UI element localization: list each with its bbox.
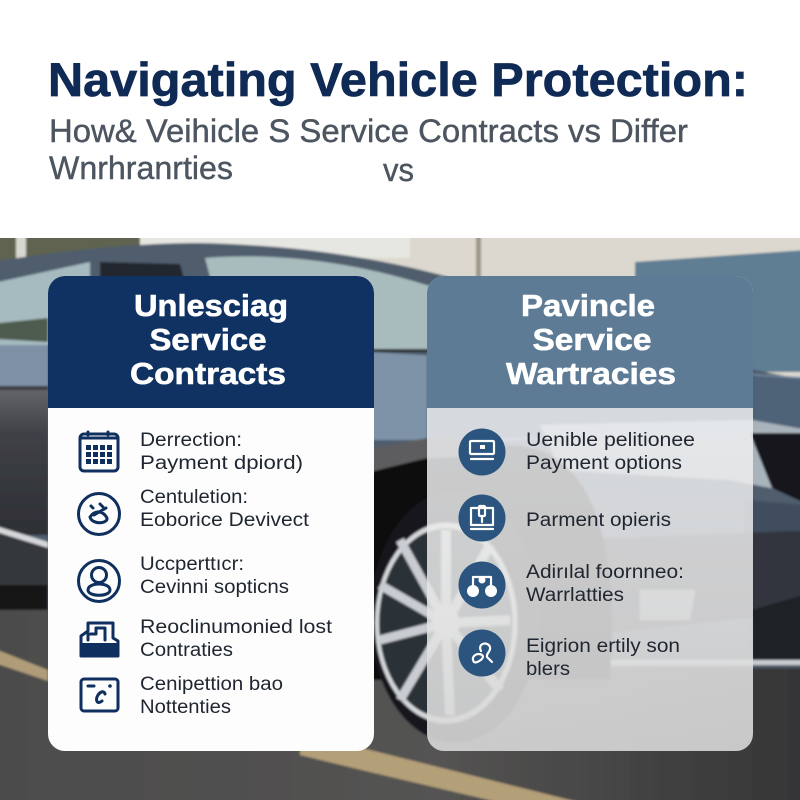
parking lines <box>0 643 48 681</box>
panel heading: Service <box>532 322 652 357</box>
item text 3: Uccperttıcr: <box>140 554 244 575</box>
item text 4 <box>526 636 680 680</box>
item text 1 <box>140 430 303 474</box>
subtitle: Wnrhranrties <box>49 150 233 186</box>
item text 3: Warrlatties <box>526 585 624 606</box>
item text 3: Cevinni sopticns <box>140 577 289 598</box>
panel heading: Wartracies <box>506 356 676 391</box>
item text 5: Cenipettion bao <box>140 674 283 695</box>
panel heading: Unlesciag <box>134 288 288 323</box>
icon: calendar <box>80 432 118 471</box>
item text 5 <box>140 674 283 718</box>
wheel arch and tyre <box>370 444 612 680</box>
item text 2: Parment opieris <box>526 510 671 531</box>
item text 4: Contraties <box>140 640 233 661</box>
panel header <box>48 276 374 408</box>
icon: folder <box>81 623 118 656</box>
subtitle: How& Veihicle S Service Contracts vs Differ <box>49 113 688 149</box>
item text 1: Uenible pelitionee <box>526 430 695 451</box>
item text 4: blers <box>526 659 570 680</box>
subtitle: vs <box>383 152 414 188</box>
icon: circle face <box>78 494 120 534</box>
panel heading <box>130 288 288 391</box>
icon: payment card <box>458 428 506 476</box>
panel heading: Service <box>150 322 266 357</box>
item text 1 <box>526 430 695 474</box>
icon: person <box>78 560 120 602</box>
car body <box>0 243 800 668</box>
white title band <box>0 0 800 238</box>
item text 4 <box>140 617 333 661</box>
item text 1: Payment dpiord) <box>140 453 303 474</box>
icon: note card <box>81 679 118 711</box>
icon: book <box>458 494 506 542</box>
panel header <box>427 276 753 408</box>
panel heading: Pavincle <box>521 288 655 323</box>
panel: service contracts <box>48 276 374 751</box>
title: Navigating Vehicle Protection: <box>48 53 748 106</box>
item text 2 <box>140 487 310 531</box>
background photo: parked car <box>0 220 800 800</box>
item text 1: Payment options <box>526 453 682 474</box>
subtitle <box>49 113 688 188</box>
item text 5: Nottenties <box>140 697 231 718</box>
panel body <box>48 276 374 751</box>
headlight and grille <box>540 420 800 510</box>
item text 3 <box>140 554 289 598</box>
panel heading <box>506 288 676 391</box>
panel body <box>427 276 753 751</box>
item text 4: Reoclinumonied lost <box>140 617 333 638</box>
icon: ribbon <box>458 630 506 676</box>
item text 3 <box>526 562 684 606</box>
item text 2: Centuletion: <box>140 487 248 508</box>
item text 4: Eigrion ertily son <box>526 636 680 657</box>
panel: vehicle warranties <box>427 276 753 751</box>
icon: linked nodes <box>458 562 506 608</box>
item text 2: Eoborice Devivect <box>140 510 310 531</box>
item text 1: Derrection: <box>140 430 242 451</box>
item text 3: Adirılal foornneo: <box>526 562 684 583</box>
panel heading: Contracts <box>130 356 286 391</box>
